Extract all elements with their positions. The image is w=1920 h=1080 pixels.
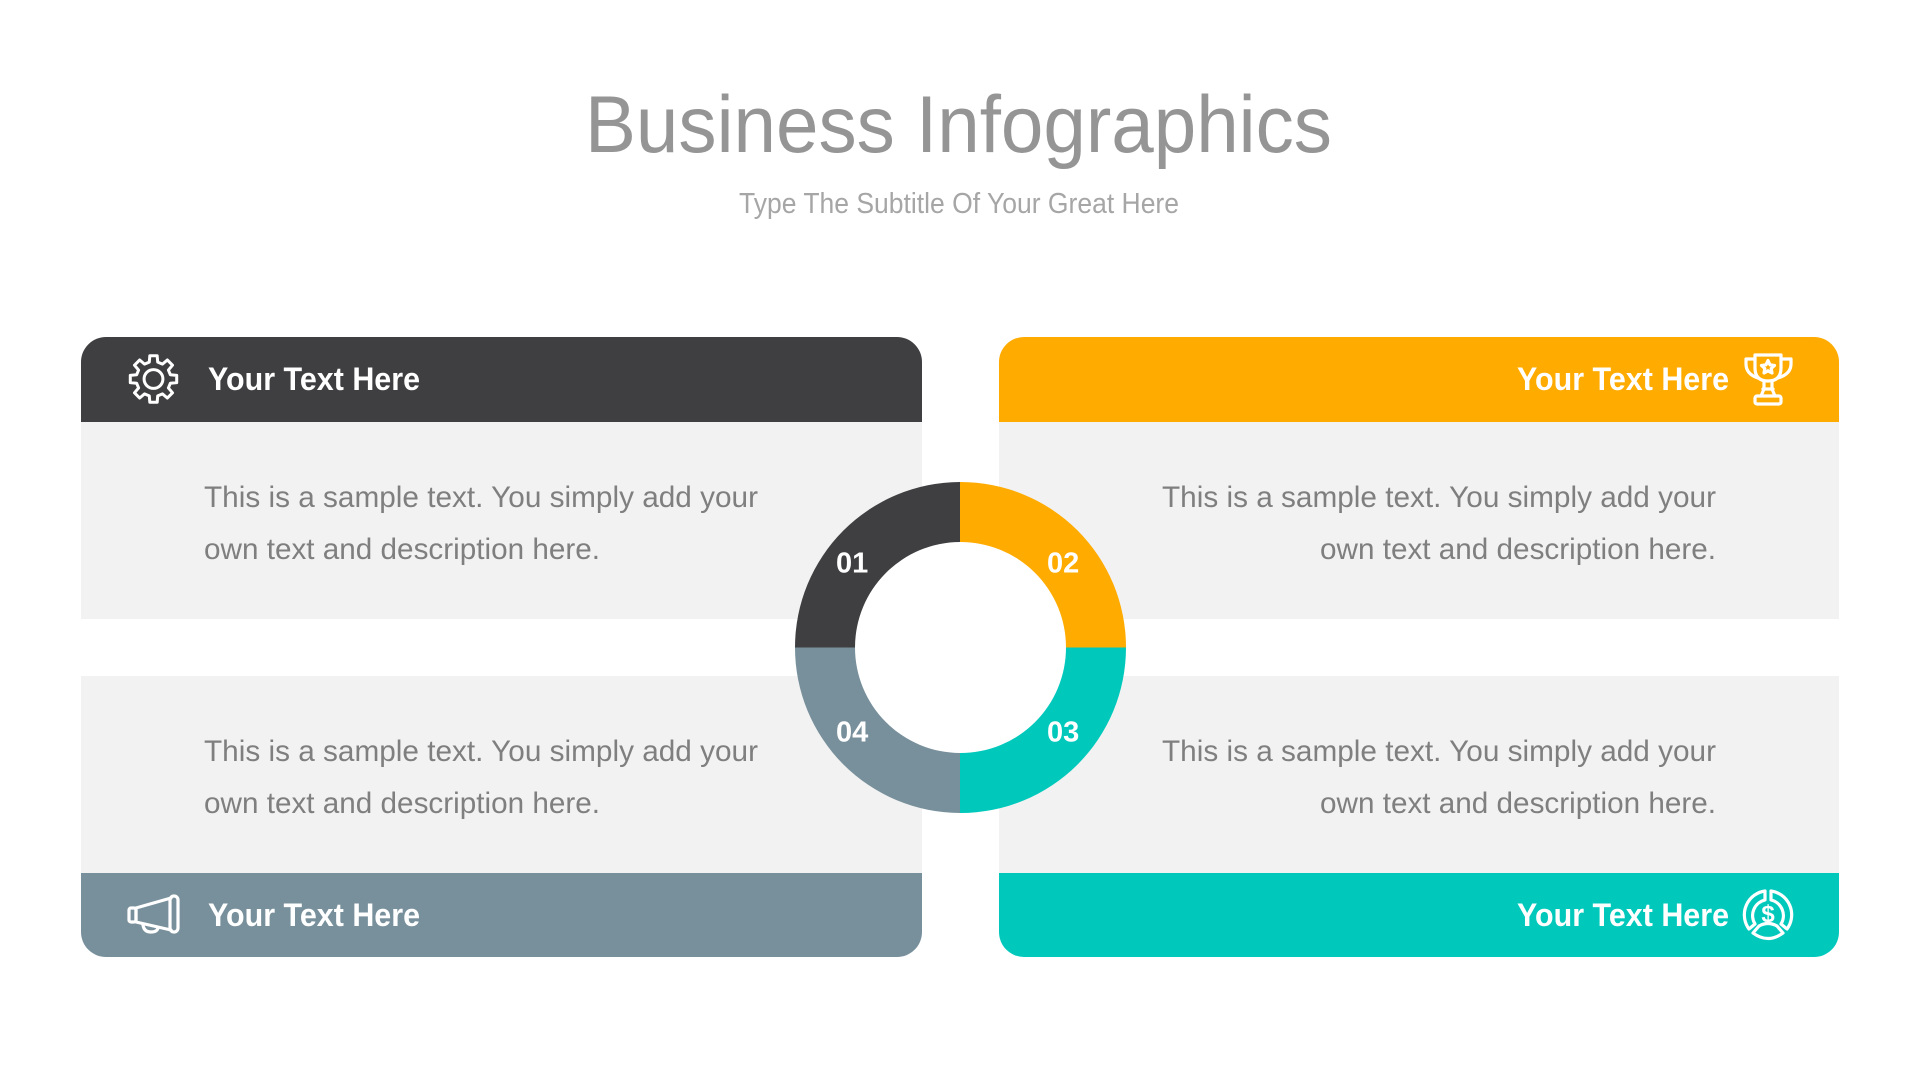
- heading: bottom right: Your Text Here: [1517, 897, 1729, 933]
- icon: gear: [130, 356, 177, 402]
- panel: top left: [81, 337, 922, 619]
- segment 01: [795, 482, 960, 648]
- icon: trophy: [1746, 355, 1791, 404]
- segment 01: 01: [836, 548, 868, 580]
- text block: bottom right: own text and description here.: [1320, 787, 1716, 820]
- icon: dollar chart: $: [1761, 901, 1775, 928]
- heading: top left: Your Text Here: [208, 361, 420, 397]
- icon: dollar chart: [1744, 891, 1792, 938]
- text block: top right: own text and description here.: [1320, 533, 1716, 566]
- subtitle: Type The Subtitle Of Your Great Here: [739, 188, 1179, 220]
- body background: bottom left: [81, 676, 922, 873]
- segment 04: [795, 648, 960, 813]
- text block: bottom right: This is a sample text. You simply add your: [1162, 735, 1716, 768]
- text block: top left: This is a sample text. You simply add your: [204, 481, 758, 514]
- text block: bottom left: This is a sample text. You simply add your: [204, 735, 758, 768]
- segment 03: [960, 648, 1126, 813]
- segment 02: 02: [1047, 548, 1079, 580]
- icon: megaphone: [129, 896, 178, 932]
- segment 02: [960, 482, 1126, 648]
- heading: bottom left: Your Text Here: [208, 897, 420, 933]
- panel: bottom right: [999, 676, 1839, 957]
- header bar: bottom right: [999, 873, 1839, 957]
- text block: bottom left: own text and description here.: [204, 787, 600, 820]
- header bar: bottom left: [81, 873, 922, 957]
- segment 03: 03: [1047, 716, 1079, 748]
- header bar: top right: [999, 337, 1839, 422]
- donut chart: [795, 482, 1126, 813]
- segment 04: 04: [836, 716, 868, 748]
- text block: top left: own text and description here.: [204, 533, 600, 566]
- heading: top right: Your Text Here: [1517, 361, 1729, 397]
- title: Business Infographics: [585, 80, 1332, 170]
- text block: top right: This is a sample text. You simply add your: [1162, 481, 1716, 514]
- panel: top right: [999, 337, 1839, 619]
- body background: top left: [81, 422, 922, 619]
- body background: bottom right: [999, 676, 1839, 873]
- panel: bottom left: [81, 676, 922, 957]
- body background: top right: [999, 422, 1839, 619]
- center hole: [854, 542, 1066, 754]
- header bar: top left: [81, 337, 922, 422]
